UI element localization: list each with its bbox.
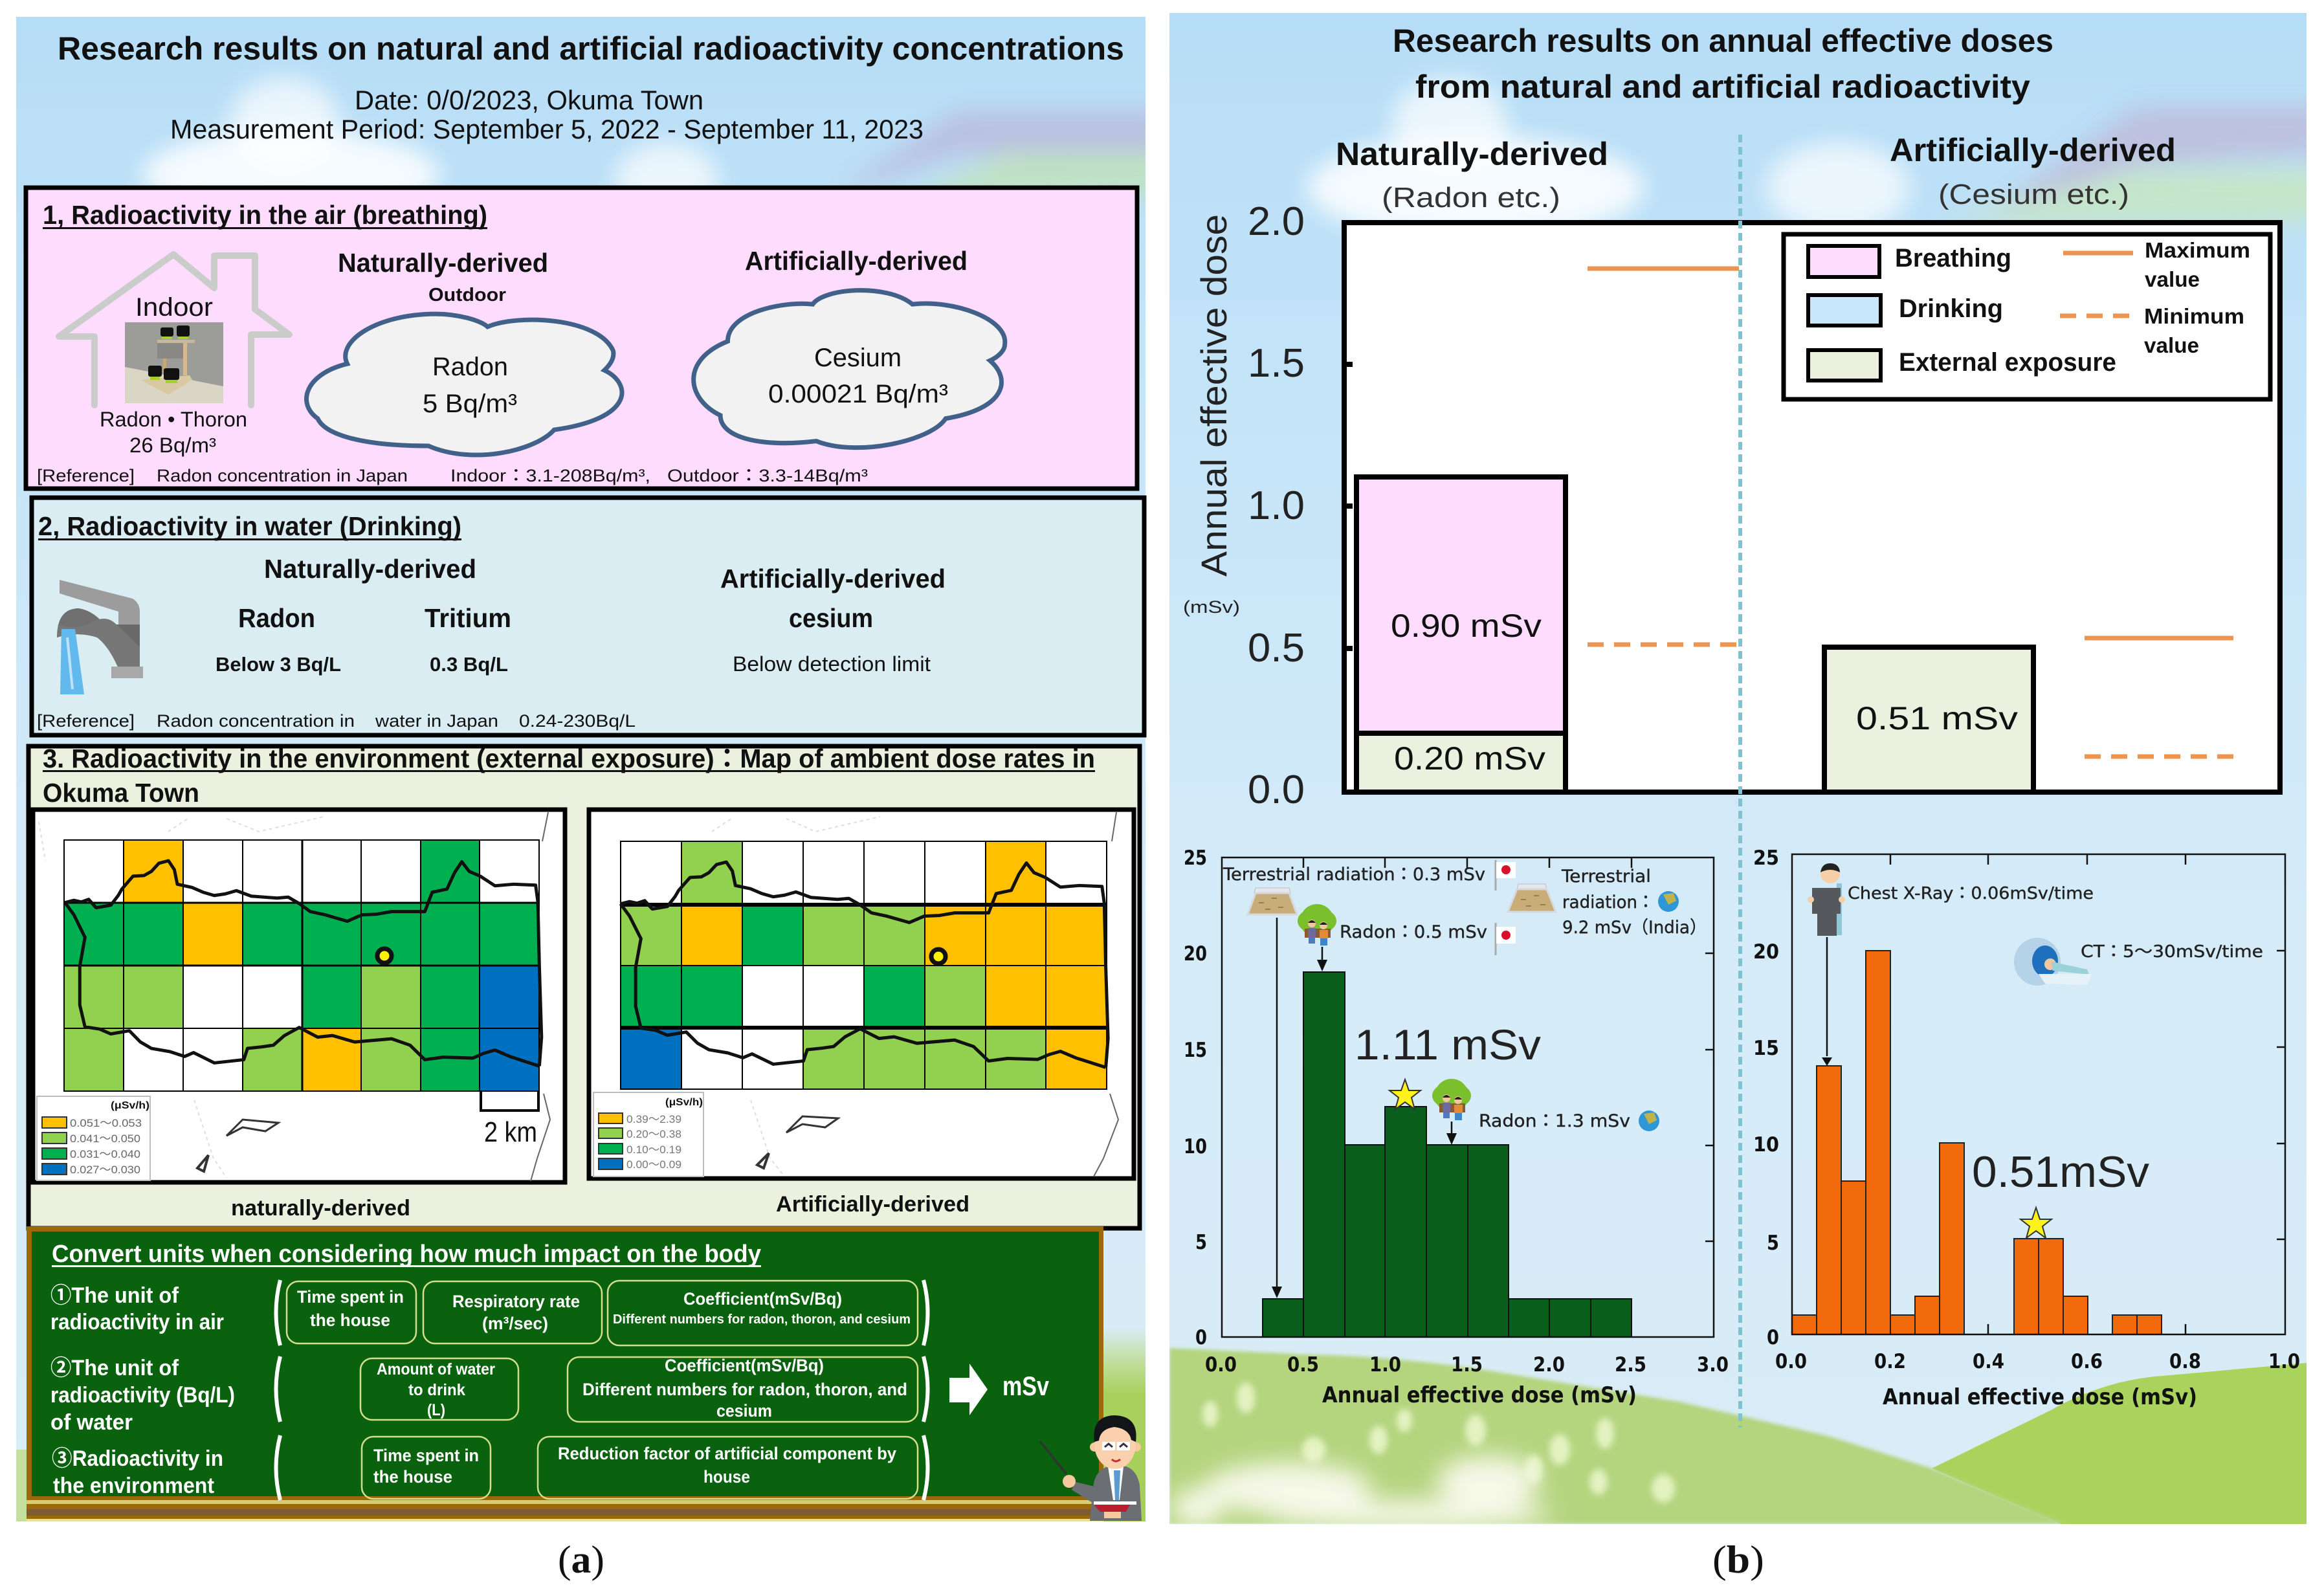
legend: natural dose rates: (μSv/h) [111, 1100, 149, 1111]
arrow: conversion to mSv [949, 1364, 988, 1415]
y axis ticks [1344, 364, 1353, 648]
arrow: radon world [1446, 1122, 1457, 1145]
y labels: artificial [1753, 846, 1779, 1349]
text: naturally-derived heading: Naturally-derived [338, 248, 548, 278]
x labels: artificial: 0.0 [1775, 1350, 1807, 1373]
x labels: artificial: 0.2 [1874, 1350, 1906, 1373]
right title: from natural and artificial radioactivity [1415, 69, 2030, 105]
legend: artificial dose rates: 0.00～0.09 [626, 1158, 681, 1171]
row 3 label: the environment [53, 1474, 214, 1498]
box: coefficient row 1: Different numbers for radon, thoron, and cesium [613, 1312, 911, 1327]
label: indoor: Indoor [135, 293, 213, 322]
panel 1: radioactivity in the air [26, 188, 1137, 489]
x labels: natural: 1.0 [1369, 1353, 1401, 1376]
box: coefficient row 2: Different numbers for radon, thoron, and [582, 1380, 907, 1399]
cloud: outdoor radon [307, 314, 622, 455]
annotation: CT: CT：5～30mSv/time [2081, 942, 2263, 962]
reference note: water: 0.24-230Bq/L [519, 711, 636, 731]
text: naturally-derived heading: Outdoor [428, 285, 506, 305]
y labels: natural: 20 [1184, 942, 1207, 966]
box: time spent row 1: the house [310, 1310, 390, 1330]
brackets [276, 1280, 928, 1500]
reference note: air: Outdoor：3.3-14Bq/m³ [667, 466, 868, 485]
y axis numbers: 2.0 [1248, 199, 1305, 244]
icon: faucet with water [57, 580, 143, 694]
icon: tree and people 1 [1298, 904, 1336, 945]
x axis title: natural: Annual effective dose (mSv) [1322, 1382, 1637, 1408]
box: reduction factor: Reduction factor of artificial component by [558, 1444, 896, 1463]
marker: Okuma site [377, 949, 392, 963]
row 2 label: of water [50, 1410, 133, 1435]
row 1 label: ①The unit of [50, 1283, 179, 1308]
y labels: artificial: 10 [1753, 1133, 1779, 1156]
caption: artificially-derived map: Artificially-derived [776, 1192, 969, 1217]
text: indoor radon thoron value: 26 Bq/m³ [129, 434, 216, 457]
icon: house outline [59, 254, 289, 405]
box: time spent row 3: Time spent in [373, 1446, 479, 1465]
chart legend: Maximum [2145, 238, 2250, 262]
y labels: artificial: 5 [1767, 1232, 1779, 1255]
value: 0.51 mSv: 0.51mSv [1972, 1147, 2149, 1197]
bar label: 0.51 mSv: 0.51 mSv [1856, 700, 2018, 736]
annotation: terrestrial radiation India [1561, 867, 1707, 938]
y axis numbers: 0.0 [1248, 768, 1305, 812]
y labels: natural: 15 [1184, 1039, 1207, 1062]
x axis title: artificial: Annual effective dose (mSv) [1883, 1384, 2197, 1410]
legend: artificial dose rates: 0.10～0.19 [626, 1144, 681, 1156]
box: respiratory rate: Respiratory rate [452, 1292, 580, 1311]
annotation: chest x-ray: Chest X-Ray：0.06mSv/time [1848, 884, 2094, 903]
row 2 label: radioactivity (Bq/L) [50, 1383, 235, 1408]
cloud: outdoor radon: Radon [432, 353, 508, 381]
cloud: outdoor radon: 5 Bq/m³ [423, 390, 517, 418]
cloud: cesium: 0.00021 Bq/m³ [768, 380, 948, 408]
y labels: natural: 5 [1195, 1231, 1207, 1254]
chart legend: value [2145, 267, 2200, 291]
axes frame: natural [1222, 857, 1714, 1337]
y labels: natural: 25 [1184, 846, 1207, 870]
y axis title: Annual effective dose [1193, 214, 1234, 577]
legend: artificial dose rates [593, 1092, 703, 1177]
icon: globe 2 [1639, 1111, 1659, 1131]
icon: soil field 1 [1248, 888, 1297, 914]
caption: (b): (b) [1712, 1538, 1764, 1581]
panel background: right sky with clouds, rainbow, hills and flowers [1169, 13, 2324, 1529]
icon: average star artificial [2020, 1208, 2052, 1238]
arrow: terrestrial to bar [1272, 918, 1282, 1298]
y labels: artificial: 15 [1753, 1037, 1779, 1060]
range lines [1588, 269, 2233, 757]
row 3 label: ③Radioactivity in [52, 1446, 223, 1471]
box: coefficient row 2 [568, 1356, 918, 1422]
legend: natural dose rates: 0.031～0.040 [70, 1148, 140, 1160]
bar: natural stack [1356, 477, 1566, 792]
icon: person with chest x-ray [1808, 863, 1845, 936]
box: coefficient row 1 [608, 1281, 918, 1345]
map: naturally-derived ambient dose [33, 810, 565, 1182]
icon: soil field 2 [1508, 884, 1556, 912]
x labels: artificial: 0.6 [2071, 1350, 2103, 1373]
text: artificially-derived water: Below detection limit [733, 652, 931, 676]
box: time spent row 3 [362, 1437, 491, 1499]
chart legend: value [2144, 333, 2199, 357]
y labels: natural: 0 [1195, 1326, 1207, 1349]
heading: panel 1: 1, Radioactivity in the air (breathing) [43, 200, 487, 230]
annotation: terrestrial radiation India: 9.2 mSv（India） [1562, 918, 1707, 938]
row 3 label [52, 1446, 223, 1498]
annotation: terrestrial radiation Japan: Terrestrial radiation：0.3 mSv [1223, 865, 1485, 885]
heading: artificially-derived [1890, 132, 2176, 210]
heading: naturally-derived [1336, 136, 1608, 214]
y axis numbers: 0.5 [1248, 626, 1305, 670]
histogram: naturally-derived dose [1184, 846, 1729, 1408]
reference note: air [37, 466, 868, 485]
x labels: natural: 2.0 [1533, 1353, 1565, 1376]
reference note: air: Radon concentration in Japan [157, 466, 408, 485]
caption: naturally-derived map: naturally-derived [231, 1196, 410, 1221]
divider between natural and artificial [1738, 135, 1742, 1428]
icon: globe 1 [1658, 891, 1679, 912]
row 2 label: ②The unit of [50, 1356, 179, 1380]
box: coefficient row 2: Coefficient(mSv/Bq) [665, 1356, 824, 1375]
y axis numbers: 1.0 [1248, 483, 1305, 528]
x labels: artificial [1775, 1350, 2300, 1373]
box: time spent row 1 [287, 1281, 416, 1343]
box: time spent row 3: the house [373, 1467, 452, 1487]
reference note: water: water in Japan [375, 711, 498, 731]
x labels: natural [1205, 1353, 1729, 1376]
chart legend: Drinking [1899, 294, 2003, 323]
box: amount of water: (L) [427, 1401, 445, 1419]
bar label: 0.90 mSv: 0.90 mSv [1391, 608, 1542, 644]
map: artificially-derived ambient dose [589, 810, 1134, 1178]
left title block: Research results on natural and artificial radioactivity concentrations [58, 30, 1124, 67]
y axis numbers: 1.5 [1248, 341, 1305, 386]
text: indoor radon thoron value: Radon • Thoron [100, 408, 247, 431]
box: coefficient row 2: cesium [716, 1401, 772, 1421]
legend: natural dose rates: 0.027～0.030 [70, 1164, 140, 1176]
text: naturally-derived water: Radon [238, 603, 315, 633]
caption: (a): (a) [558, 1538, 604, 1581]
reference note: water: Radon concentration in [157, 711, 355, 731]
heading: panel 2: 2, Radioactivity in water (Drinking) [38, 511, 461, 541]
icon: CT scanner [2014, 938, 2092, 986]
box: coefficient row 1: Coefficient(mSv/Bq) [683, 1289, 842, 1309]
panel: blackboard unit conversion [27, 1226, 1142, 1521]
x labels: natural: 3.0 [1697, 1353, 1729, 1376]
row 1 label [50, 1283, 224, 1334]
row 1 label: radioactivity in air [50, 1310, 224, 1334]
icon: average star natural [1389, 1079, 1421, 1109]
box: time spent row 1: Time spent in [297, 1287, 404, 1307]
legend: natural dose rates: 0.051～0.053 [70, 1117, 142, 1129]
left title block: Date: 0/0/2023, Okuma Town [355, 85, 703, 115]
legend: natural dose rates: 0.041～0.050 [70, 1133, 140, 1145]
chart legend: Breathing [1895, 244, 2011, 272]
x labels: natural: 1.5 [1451, 1353, 1483, 1376]
bars: artificial [1792, 951, 2162, 1334]
box: reduction factor [538, 1437, 918, 1499]
text: naturally-derived water: Below 3 Bq/L [216, 653, 341, 676]
panel 3: radioactivity in the environment [28, 744, 1140, 1228]
board heading: Convert units when considering how much impact on the body [52, 1241, 761, 1268]
text: naturally-derived water: Naturally-derived [264, 554, 476, 584]
x labels: natural: 0.5 [1287, 1353, 1319, 1376]
heading: artificially-derived: (Cesium etc.) [1938, 179, 2129, 210]
heading: artificially-derived: Artificially-derived [1890, 132, 2176, 168]
text: artificially-derived heading: Artificially-derived [745, 246, 968, 276]
photo: measuring device [125, 322, 223, 403]
heading: naturally-derived: (Radon etc.) [1382, 182, 1560, 214]
reference note: air: [Reference] [37, 466, 135, 485]
y axis unit: (mSv) [1183, 597, 1240, 617]
legend: artificial dose rates: 0.20～0.38 [626, 1128, 681, 1140]
heading: panel 3: 3. Radioactivity in the environment (external exposure)：Map of ambient dose rates in [43, 744, 1095, 773]
axes frame: artificial [1792, 854, 2285, 1334]
x labels: natural: 0.0 [1205, 1353, 1237, 1376]
reference note: water: [Reference] [37, 711, 135, 731]
cloud: cesium [694, 291, 1005, 448]
box: reduction factor: house [703, 1467, 750, 1487]
row 2 label [50, 1356, 235, 1435]
icon: Japan flag 1 [1496, 860, 1516, 890]
icon: tree and people 2 [1432, 1079, 1471, 1120]
text: mSv result: mSv [1002, 1371, 1050, 1401]
text: naturally-derived water: 0.3 Bq/L [430, 653, 508, 676]
box: respiratory rate [423, 1281, 602, 1343]
box: amount of water [360, 1358, 518, 1420]
x labels: artificial: 1.0 [2268, 1350, 2300, 1373]
text: naturally-derived water [216, 554, 511, 676]
text: artificially-derived water: cesium [789, 603, 873, 633]
y labels: artificial: 0 [1767, 1326, 1779, 1349]
box: amount of water: to drink [408, 1381, 465, 1399]
x labels: natural: 2.5 [1615, 1353, 1646, 1376]
bar label: 0.20 mSv: 0.20 mSv [1394, 740, 1545, 777]
x labels: artificial: 0.4 [1973, 1350, 2004, 1373]
left title block: Measurement Period: September 5, 2022 - September 11, 2023 [170, 114, 924, 144]
text: naturally-derived heading [338, 248, 548, 305]
arrow: radon Japan [1317, 947, 1327, 971]
bar: artificial external exposure [1824, 647, 2033, 792]
chart legend [1784, 234, 2270, 399]
box: amount of water: Amount of water [377, 1360, 495, 1378]
legend: artificial dose rates: (μSv/h) [665, 1097, 703, 1108]
cloud: cesium: Cesium [814, 344, 902, 372]
text: indoor radon thoron value [100, 408, 247, 457]
text: artificially-derived water [720, 564, 946, 676]
panel 2: radioactivity in water [32, 498, 1144, 735]
reference note: water [37, 711, 636, 731]
main stacked bar chart [1183, 199, 2280, 812]
legend: natural dose rates [37, 1096, 150, 1180]
annotation: terrestrial radiation India: Terrestrial [1561, 867, 1651, 887]
left title block [58, 30, 1124, 144]
histogram: artificially-derived dose [1753, 846, 2300, 1410]
y labels: natural [1184, 846, 1207, 1349]
chart legend: External exposure [1899, 348, 2116, 377]
chart legend: Minimum [2144, 304, 2244, 328]
heading: panel 3: Okuma Town [43, 778, 199, 808]
bars: natural [1263, 972, 1632, 1337]
right title [1393, 23, 2053, 105]
scale bar: 2 km [481, 1091, 538, 1148]
text: artificially-derived water: Artificially-derived [720, 564, 946, 593]
value: 1.11 mSv: 1.11 mSv [1355, 1021, 1541, 1068]
scale bar: 2 km: 2 km [484, 1116, 537, 1148]
panel background: left sky with clouds and rainbow [16, 17, 1165, 1521]
heading: panel 3 [43, 744, 1095, 808]
annotation: radon world: Radon：1.3 mSv [1479, 1111, 1630, 1131]
box: respiratory rate: (m³/sec) [482, 1314, 548, 1333]
y labels: natural: 10 [1184, 1135, 1207, 1158]
annotation: radon Japan: Radon：0.5 mSv [1340, 922, 1487, 942]
text: naturally-derived water: Tritium [425, 603, 511, 633]
right title: Research results on annual effective doses [1393, 23, 2053, 59]
icon: teacher with pointer [1040, 1415, 1142, 1521]
heading: naturally-derived: Naturally-derived [1336, 136, 1608, 172]
icon: Japan flag 2 [1496, 923, 1516, 955]
annotation: terrestrial radiation India: radiation： [1562, 892, 1654, 912]
y axis numbers [1248, 199, 1305, 812]
y labels: artificial: 20 [1753, 940, 1779, 964]
y labels: artificial: 25 [1753, 846, 1779, 870]
legend: artificial dose rates: 0.39～2.39 [626, 1113, 681, 1125]
reference note: air: Indoor：3.1-208Bq/m³, [450, 466, 650, 485]
x labels: artificial: 0.8 [2169, 1350, 2201, 1373]
arrow: x-ray to bar [1822, 937, 1832, 1066]
marker: Okuma site (artificial map) [931, 949, 946, 964]
